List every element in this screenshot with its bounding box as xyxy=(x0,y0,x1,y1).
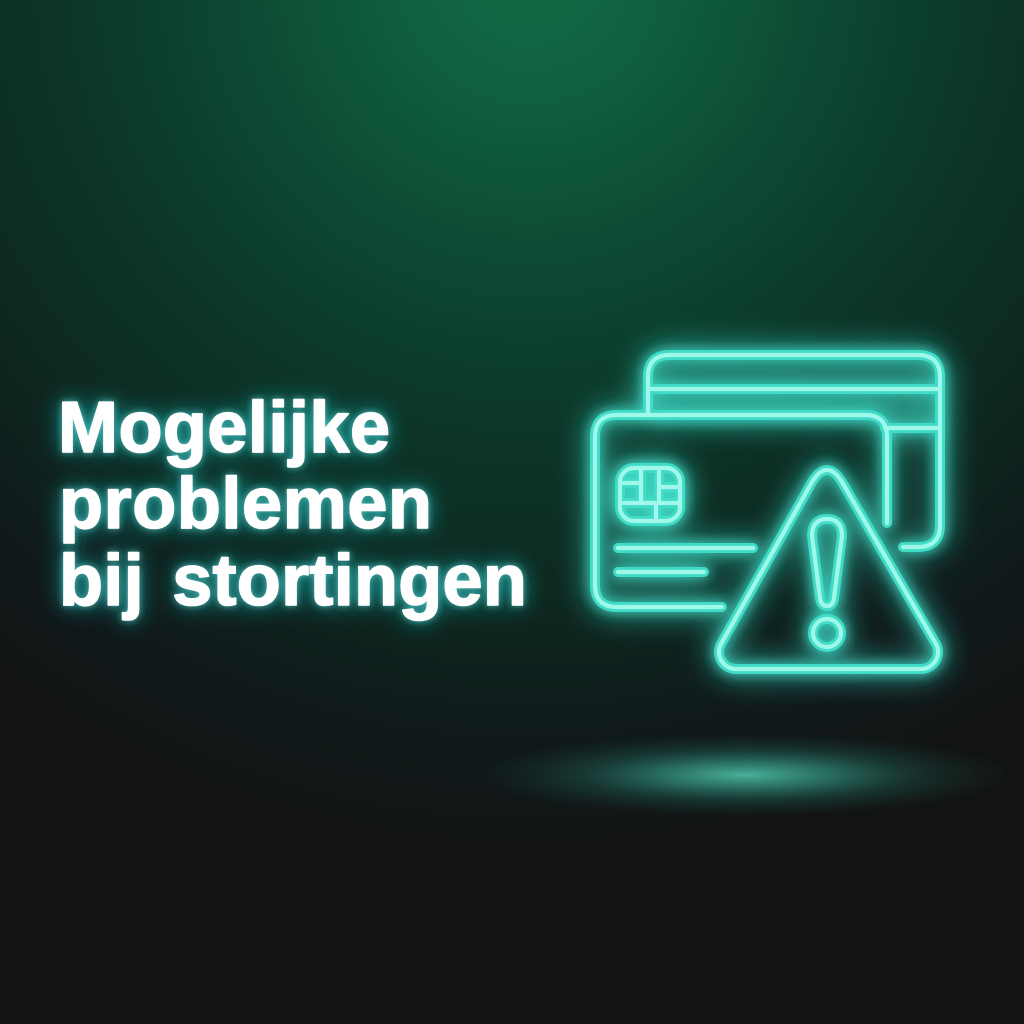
title line 1: Mogelijke xyxy=(58,388,390,468)
icon: credit cards with warning triangle xyxy=(595,355,940,669)
title line 2: problemen xyxy=(59,464,432,544)
floor glow beneath icon xyxy=(475,733,1015,817)
neon outer tube xyxy=(595,355,940,669)
neon inner core xyxy=(595,355,940,669)
title line 3: bij stortingen xyxy=(59,541,527,621)
glow band in card stripe xyxy=(652,362,936,422)
title xyxy=(58,388,527,621)
